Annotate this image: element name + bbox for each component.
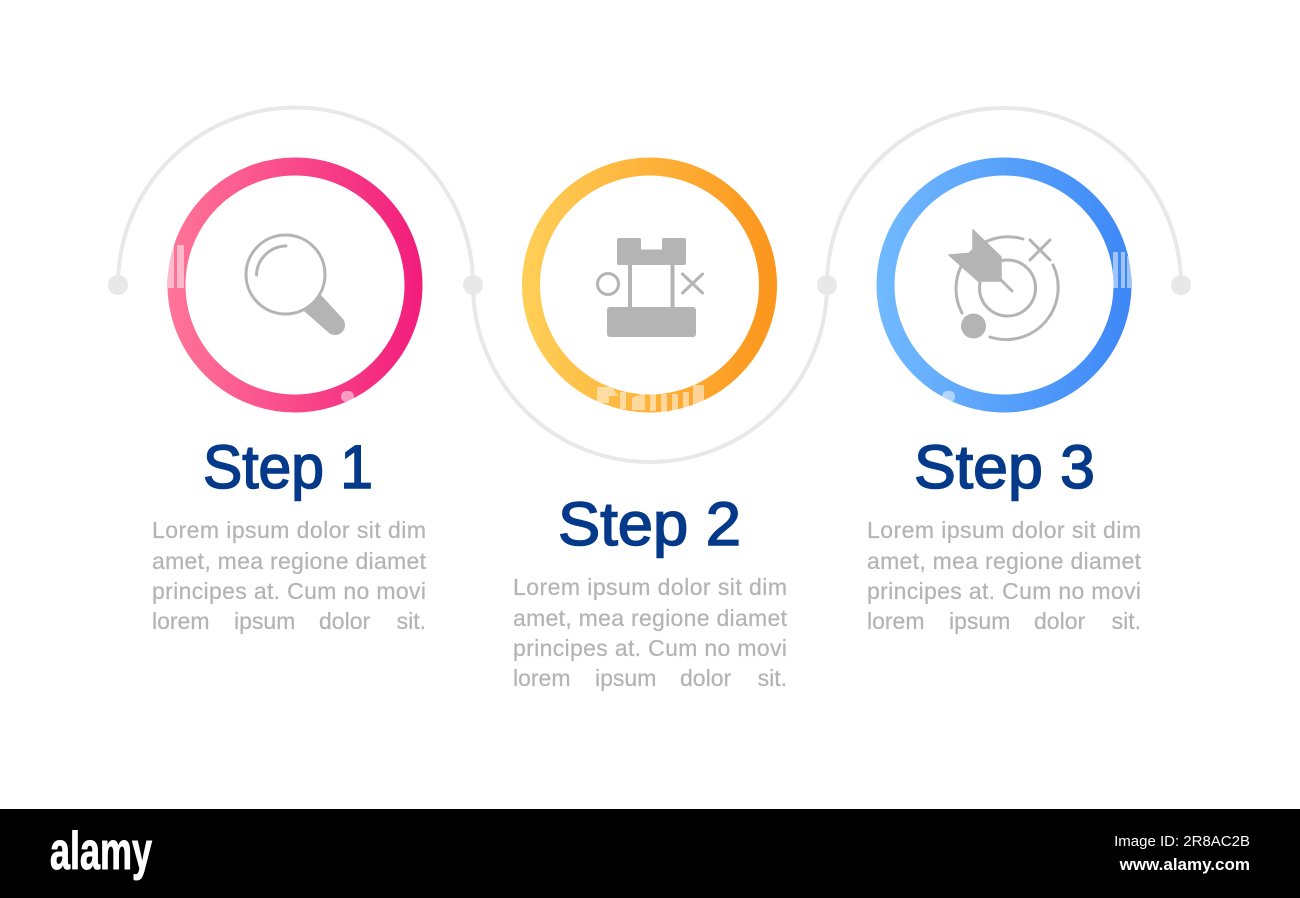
text block: step 3: principes at. Cum no movi <box>867 578 1141 604</box>
text block: step 3: Lorem ipsum dolor sit dim <box>867 517 1141 543</box>
text block: step 1: principes at. Cum no movi <box>152 578 426 604</box>
text block: step 1: sit. <box>397 608 426 634</box>
text block: step 1: Lorem ipsum dolor sit dim <box>152 517 426 543</box>
panel: step 2 <box>513 166 788 691</box>
icon: target with arrow <box>949 230 1058 340</box>
text block: step 3: dolor <box>1034 608 1085 634</box>
image id: Image ID: 2R8AC2B <box>1114 833 1250 850</box>
icon: magnifying glass <box>246 235 345 335</box>
panel: step 3 <box>867 166 1142 634</box>
text block: step 3: lorem <box>867 608 925 634</box>
text block: step 2: amet, mea regione diamet <box>513 605 788 631</box>
text block: step 1: amet, mea regione diamet <box>152 548 427 574</box>
text block: step 1: ipsum <box>234 608 295 634</box>
logo: alamy: alamy <box>50 822 152 881</box>
footer bar <box>0 809 1300 898</box>
text block: step 3: sit. <box>1112 608 1141 634</box>
heading: step 2: Step 2 <box>558 490 741 558</box>
website: www.alamy.com <box>1119 855 1250 874</box>
text block: step 1: dolor <box>319 608 370 634</box>
ring: blue <box>886 166 1122 404</box>
text block: step 3: ipsum <box>949 608 1010 634</box>
text block: step 2: sit. <box>758 665 787 691</box>
text block: step 1: lorem <box>152 608 210 634</box>
text block: step 2: lorem <box>513 665 571 691</box>
text block: step 2: dolor <box>680 665 731 691</box>
text block: step 3: amet, mea regione diamet <box>867 548 1142 574</box>
heading: step 3: Step 3 <box>914 433 1095 501</box>
connector: grey wave line with nodes <box>108 107 1191 462</box>
text block: step 2 <box>513 574 788 691</box>
ring: orange <box>531 166 768 404</box>
heading: step 1: Step 1 <box>203 433 373 501</box>
text block: step 2: principes at. Cum no movi <box>513 635 787 661</box>
text block: step 1 <box>152 517 427 634</box>
text block: step 3 <box>867 517 1142 634</box>
text block: step 2: ipsum <box>595 665 656 691</box>
panel: step 1 <box>152 166 427 634</box>
text block: step 2: Lorem ipsum dolor sit dim <box>513 574 787 600</box>
ring: pink <box>176 166 414 404</box>
icon: chess rook with O and X <box>598 238 702 337</box>
